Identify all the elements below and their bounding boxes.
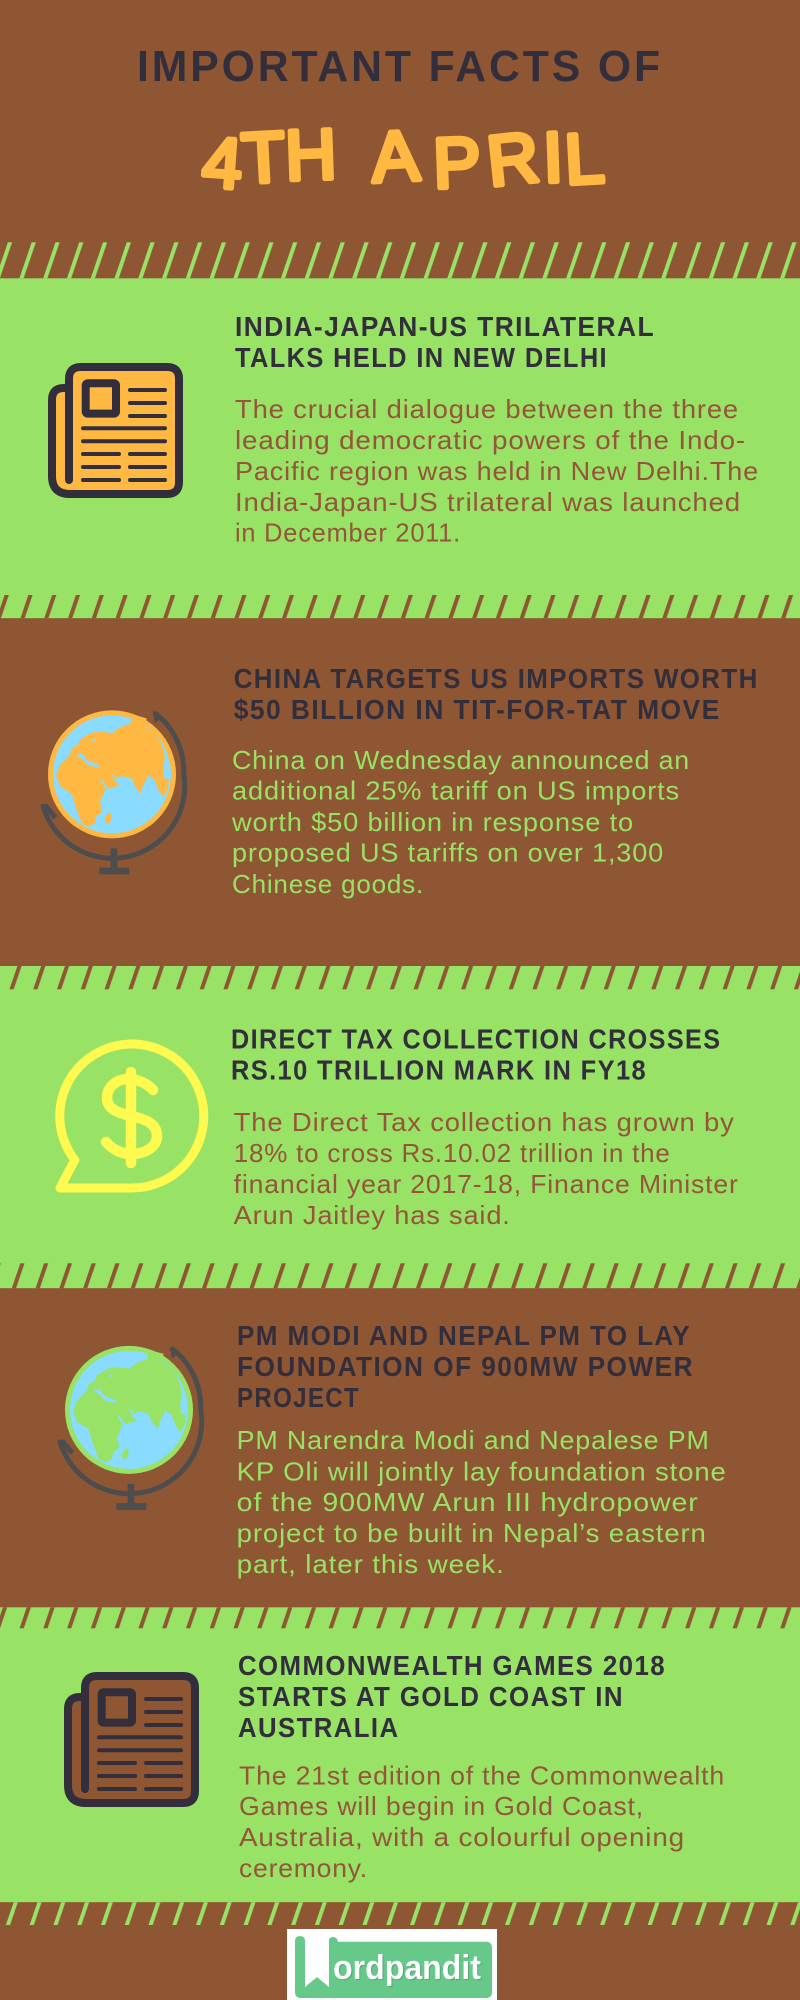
body text: 18% to cross Rs.10.02 trillion in the [234,1138,671,1168]
heading: PM MODI AND NEPAL PM TO LAY [237,1320,691,1351]
heading: AUSTRALIA [238,1712,400,1743]
heading: CHINA TARGETS US IMPORTS WORTH [234,663,759,694]
heading: DIRECT TAX COLLECTION CROSSES [231,1024,721,1055]
panel: commonwealth games [0,1607,800,1902]
body text: Chinese goods. [232,869,424,899]
body text: PM Narendra Modi and Nepalese PM [237,1425,710,1455]
body text [237,1425,727,1579]
body text [234,1107,739,1230]
panel: header [0,0,800,278]
heading: STARTS AT GOLD COAST IN [238,1681,624,1712]
panel: direct tax collection [0,966,800,1288]
heading: INDIA-JAPAN-US TRILATERAL [235,311,655,342]
title: important facts of: IMPORTANT FACTS OF [137,42,663,91]
heading [238,1650,666,1743]
icon: globe [41,710,185,874]
body text [239,1760,725,1883]
body text: China on Wednesday announced an [232,745,690,775]
heading: TALKS HELD IN NEW DELHI [235,342,608,373]
body text: proposed US tariffs on over 1,300 [232,838,664,868]
heading: FOUNDATION OF 900MW POWER [237,1351,694,1382]
heading [235,311,655,373]
body text: worth $50 billion in response to [231,807,634,837]
heading: RS.10 TRILLION MARK IN FY18 [231,1054,647,1086]
body text [231,745,690,899]
body text: The crucial dialogue between the three [235,394,739,424]
icon: globe [58,1346,202,1510]
icon: newspaper [68,1676,195,1803]
heading [231,1024,721,1086]
logo: wordpandit: ordpandit [333,1949,481,1987]
body text: part, later this week. [237,1549,505,1579]
body text: KP Oli will jointly lay foundation stone [237,1456,727,1486]
title: 4th april: 4TH APRIL [200,115,606,205]
icon: newspaper [52,367,179,494]
body text: The 21st edition of the Commonwealth [239,1760,725,1790]
heading [237,1320,694,1413]
body text: of the 900MW Arun III hydropower [237,1487,699,1517]
body text: Games will begin in Gold Coast, [239,1791,644,1821]
body text: Arun Jaitley has said. [234,1200,511,1230]
panel: india-japan-us talks [0,278,800,618]
body text: financial year 2017-18, Finance Minister [234,1169,739,1199]
body text: ceremony. [239,1853,368,1883]
body text: The Direct Tax collection has grown by [234,1107,735,1137]
panel: modi and nepal pm [0,1288,800,1607]
body text: in December 2011. [235,518,461,548]
icon: dollar speech bubble [60,1044,204,1188]
heading [234,663,759,725]
body text: additional 25% tariff on US imports [232,776,680,806]
logo: wordpandit: ordpandit [334,1950,482,1988]
heading: $50 BILLION IN TIT-FOR-TAT MOVE [234,694,721,725]
body text: India-Japan-US trilateral was launched [235,487,741,517]
heading: PROJECT [237,1382,360,1413]
panel: china targets us imports [0,618,800,966]
logo: wordpandit [287,1929,497,2000]
heading: COMMONWEALTH GAMES 2018 [238,1650,666,1681]
body text: project to be built in Nepal’s eastern [237,1518,707,1548]
body text: Australia, with a colourful opening [239,1822,685,1852]
body text [235,394,759,548]
body text: leading democratic powers of the Indo- [235,425,746,455]
body text: Pacific region was held in New Delhi.The [235,456,759,486]
panel: footer [0,1902,800,2000]
